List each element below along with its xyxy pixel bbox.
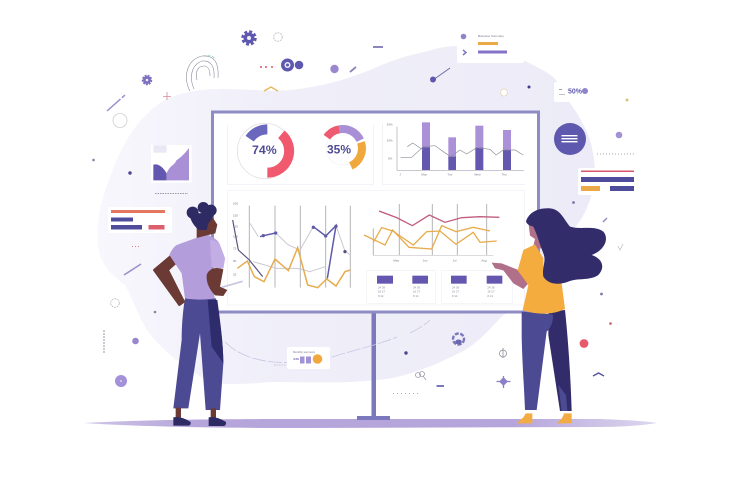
- stat cards: [367, 271, 513, 303]
- axis labels: J: [399, 172, 401, 176]
- icon: cog with face: [453, 334, 464, 344]
- whiteboard: [212, 112, 538, 312]
- left line chart: 125: [233, 225, 238, 229]
- floor shadow: [83, 419, 657, 428]
- panel: line charts: [228, 190, 524, 305]
- diagonal line: [107, 95, 125, 111]
- left line chart: 150: [233, 214, 238, 218]
- icon: sparkle plus: [496, 376, 510, 388]
- neck and face: [529, 222, 542, 248]
- donut chart: 74%: 74%: [252, 143, 277, 157]
- person: man with tablet: [154, 202, 243, 426]
- right line chart: [364, 204, 499, 262]
- stat cards: 8 14: [452, 294, 458, 298]
- card: percentage: 50%: [568, 88, 583, 96]
- axis labels: 10%: [387, 139, 393, 143]
- background blob: [98, 46, 595, 384]
- left line chart: 50: [233, 259, 237, 263]
- card: bottom mini stats: [274, 347, 330, 369]
- card: percentage: [554, 82, 597, 102]
- shirt: [169, 235, 225, 300]
- left arm: [154, 256, 184, 305]
- axis labels: Mon: [421, 172, 427, 176]
- small dash: [373, 46, 383, 48]
- stat cards: 8 14: [378, 294, 384, 298]
- outline circle: [113, 114, 127, 128]
- card: bottom mini stats: Monthly summary: [293, 350, 316, 354]
- axis labels: 5%: [388, 156, 393, 160]
- stat cards: 24 38: [413, 285, 421, 289]
- stat cards: 16 27: [413, 290, 421, 294]
- whiteboard stand: [357, 312, 390, 420]
- icon: menu circle: [554, 123, 586, 155]
- pants: [548, 310, 572, 411]
- icon: large gear: [242, 32, 256, 44]
- red dots and coin icons: [260, 58, 303, 72]
- ankles and shoes: [173, 408, 226, 426]
- left line chart: 100: [233, 235, 238, 239]
- donut chart: 74%: [237, 123, 293, 179]
- purple dot and dash: [330, 65, 356, 73]
- stat cards: 16 27: [452, 290, 460, 294]
- axis labels: [387, 123, 507, 176]
- left line chart: 75: [233, 247, 237, 251]
- left line chart: [233, 202, 350, 288]
- donut chart: 35%: 35%: [327, 142, 351, 156]
- hair: [187, 202, 217, 230]
- icon: chain: [416, 372, 426, 380]
- card: area chart picture: [151, 145, 192, 183]
- card: bottom mini stats: 4.56: [293, 357, 299, 361]
- icon: dashed ring: [274, 33, 282, 41]
- dashed connector curve: [225, 320, 430, 362]
- icon: chevron: [264, 87, 278, 91]
- shirt: [518, 244, 565, 314]
- right line chart: Jun: [423, 258, 428, 262]
- stat cards: 24 38: [378, 285, 386, 289]
- icon: plus mark: [163, 92, 171, 100]
- trend line: [401, 143, 523, 157]
- left side decorations: [92, 159, 156, 387]
- dot with stick: [430, 68, 450, 82]
- axis labels: Thu: [502, 172, 507, 176]
- tablet: [222, 281, 243, 287]
- right line chart: Aug: [481, 258, 487, 262]
- axis labels: 20%: [387, 123, 393, 127]
- right line chart: Jul: [453, 258, 457, 262]
- card: progress summary: Business Summary: [478, 34, 504, 38]
- board content: [227, 122, 525, 305]
- axes: [397, 127, 524, 170]
- icon: phi symbol: [500, 348, 506, 358]
- stat cards: 8 14: [487, 294, 493, 298]
- stat cards: 16 27: [378, 290, 386, 294]
- card: progress summary: [457, 30, 524, 63]
- axis labels: Tue: [447, 172, 453, 176]
- axis labels: Wed: [474, 172, 481, 176]
- cream ring: [500, 89, 508, 96]
- bottom decorations: [393, 244, 623, 394]
- bars: [422, 122, 511, 170]
- panel: bar and line chart: [383, 122, 525, 184]
- left line chart: 100: [233, 202, 238, 206]
- right line chart: May: [393, 258, 399, 262]
- card: right bars: [578, 168, 641, 195]
- right arm: [207, 268, 227, 296]
- stat cards: 24 38: [452, 285, 460, 289]
- icon: small gear: [142, 76, 152, 84]
- card: left bars: [108, 207, 172, 233]
- head: [197, 216, 217, 240]
- stat cards: 24 38: [487, 285, 495, 289]
- right side dots: [572, 98, 636, 222]
- hair: [526, 208, 606, 284]
- left line chart: 25: [233, 273, 237, 277]
- small dark dot: [528, 86, 530, 88]
- icon: fingerprint: [186, 56, 218, 91]
- pants: [173, 298, 223, 410]
- person: woman pointing: [492, 208, 606, 423]
- feet: [517, 413, 572, 423]
- donut chart: 35%: [326, 129, 362, 166]
- panel: donut charts: [227, 123, 373, 184]
- arm: [492, 263, 530, 289]
- stat cards: 8 14: [413, 294, 419, 298]
- stat cards: 16 27: [487, 290, 495, 294]
- dotted line: [155, 192, 188, 194]
